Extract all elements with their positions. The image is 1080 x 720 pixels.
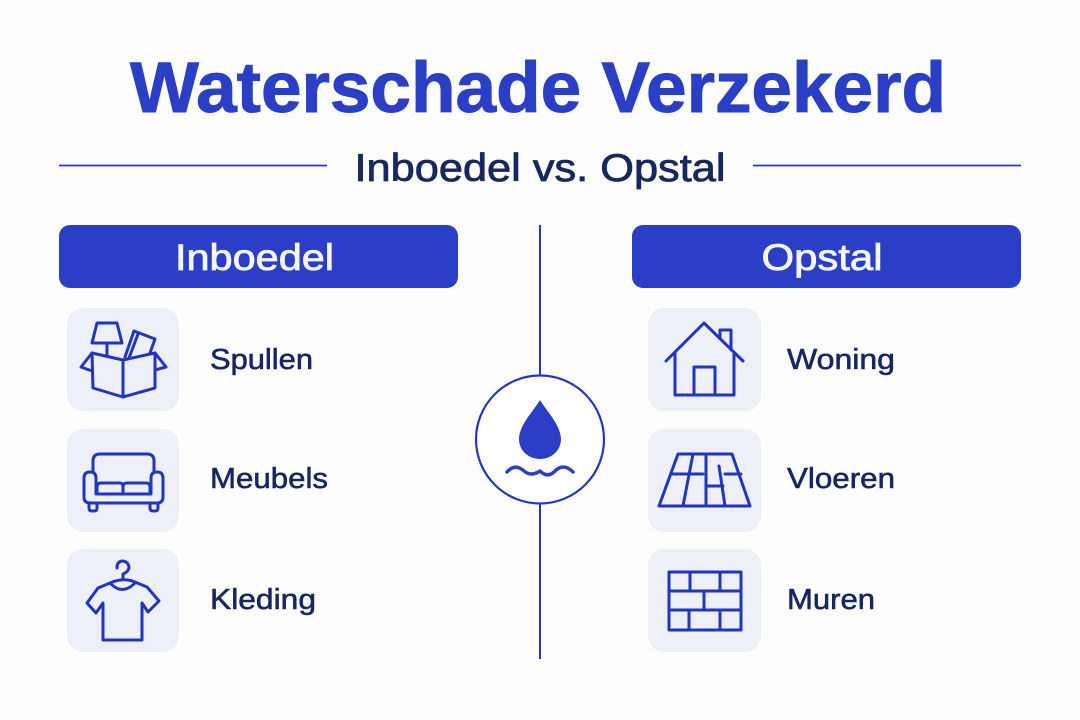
icon: brick wall (669, 572, 741, 630)
item: Muren (648, 549, 875, 652)
icon: shirt on hanger (87, 561, 159, 640)
icon: waves (507, 467, 573, 475)
item: Spullen (67, 308, 313, 411)
label: Woning (787, 344, 895, 376)
icon: house (666, 323, 743, 395)
label: Meubels (210, 463, 328, 495)
item: Kleding (67, 549, 316, 652)
item: Vloeren (648, 429, 895, 532)
panel: Opstal (632, 225, 1021, 652)
icon: moving box with lamp (81, 323, 166, 397)
item: Woning (648, 308, 895, 411)
item: Meubels (67, 429, 328, 532)
label: Kleding (210, 584, 316, 616)
icon: water drop (519, 400, 561, 459)
heading: Opstal: Opstal (762, 237, 882, 278)
label: Muren (787, 584, 875, 616)
icon: floor planks (659, 454, 750, 506)
label: Spullen (210, 344, 313, 376)
heading: Inboedel: Inboedel (175, 237, 334, 278)
central divider with water icon (476, 225, 604, 659)
icon: sofa (84, 454, 163, 511)
heading: Opstal (632, 225, 1021, 288)
heading: Inboedel (59, 225, 458, 288)
subtitle with rules: Inboedel vs. Opstal (354, 147, 726, 190)
label: Vloeren (787, 463, 895, 495)
title: Waterschade Verzekerd (130, 48, 946, 128)
panel: Inboedel (59, 225, 458, 652)
